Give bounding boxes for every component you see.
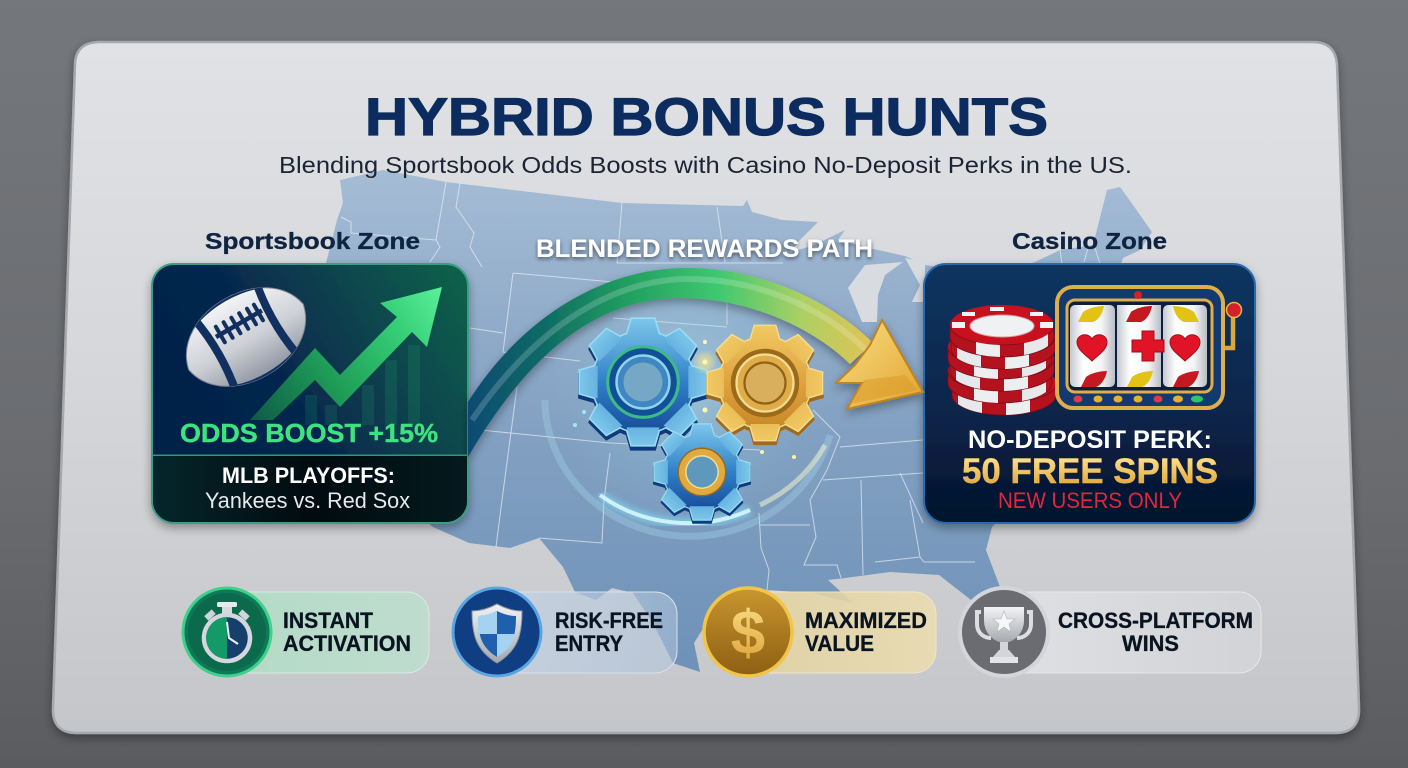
label: INSTANT <box>283 608 374 633</box>
subtitle: Blending Sportsbook Odds Boosts with Casino No-Deposit Perks in the US. <box>279 152 1132 178</box>
heading: sportsbook zone: Sportsbook Zone <box>205 228 420 254</box>
label: MAXIMIZED <box>805 608 927 633</box>
icon: gold gear <box>708 326 822 443</box>
arrow: blended rewards path <box>468 268 923 457</box>
panel: sportsbook card <box>152 259 468 523</box>
perk heading: NO-DEPOSIT PERK: <box>968 426 1212 454</box>
heading: casino zone: Casino Zone <box>1012 228 1167 254</box>
icon: gold coin: $ <box>731 599 765 668</box>
odds boost text: ODDS BOOST +15% <box>180 418 438 448</box>
icon: small blue gear <box>654 424 750 522</box>
badge: instant activation <box>183 588 429 676</box>
icon: football <box>186 287 306 387</box>
new users note: NEW USERS ONLY <box>998 488 1182 513</box>
icon: chip stack <box>948 305 1056 415</box>
badge: cross-platform wins: WINS <box>1122 631 1179 656</box>
badge: maximized value: VALUE <box>805 631 874 656</box>
badge: cross-platform wins <box>960 588 1261 676</box>
icon: stopwatch <box>183 588 271 676</box>
icon: rising green arrow <box>250 287 442 420</box>
title: HYBRID BONUS HUNTS <box>365 88 1048 147</box>
panel: casino card <box>924 264 1255 523</box>
map: United States <box>310 170 1152 672</box>
match heading: MLB PLAYOFFS: <box>222 463 395 488</box>
icon: gold coin <box>704 588 792 676</box>
icon: shield <box>453 588 541 676</box>
chart bars behind arrow <box>305 345 420 425</box>
icon: blue gear <box>580 319 706 449</box>
badge: instant activation: ACTIVATION <box>283 631 411 656</box>
heading: blended rewards path: BLENDED REWARDS PATH <box>536 235 873 263</box>
bottom strip <box>153 456 467 522</box>
icon: slot machine <box>1057 287 1242 408</box>
sparkles <box>573 340 796 459</box>
label: CROSS-PLATFORM <box>1058 608 1253 633</box>
badge: maximized value <box>704 588 936 676</box>
icon: trophy <box>960 588 1048 676</box>
label: RISK-FREE <box>555 608 663 633</box>
free spins offer: 50 FREE SPINS <box>962 452 1218 491</box>
badge: risk-free entry: ENTRY <box>555 631 623 656</box>
match name: Yankees vs. Red Sox <box>205 488 410 513</box>
badge: risk-free entry <box>453 588 677 676</box>
icon: gear glow ring <box>545 250 830 536</box>
